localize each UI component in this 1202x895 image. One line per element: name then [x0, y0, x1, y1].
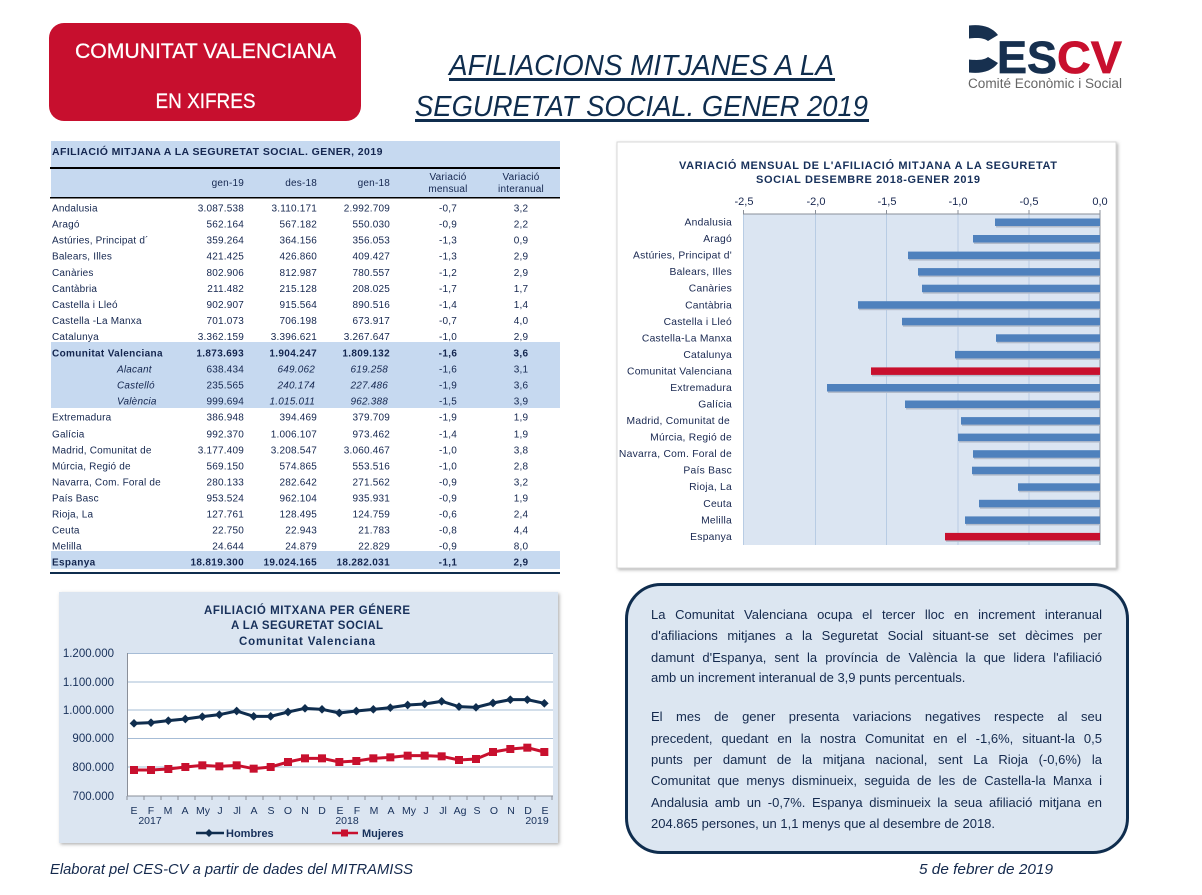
badge: Comunitat Valenciana en xifres: EN XIFRES [156, 90, 256, 113]
logo: CES-CV [968, 25, 1122, 91]
table rows continued: 1,9 [514, 429, 528, 440]
table rows continued: Melilla [52, 541, 82, 552]
table rows: 4,0 [514, 316, 528, 327]
x axis labels: -2,0 [807, 196, 825, 208]
logo: CES-CV: CV [1057, 32, 1122, 83]
rows: provinces: 3,9 [514, 396, 528, 408]
rows: provinces: 962.388 [350, 396, 388, 408]
month labels: D [318, 805, 326, 817]
month labels: My [402, 805, 417, 817]
month labels: M [164, 805, 172, 817]
table rows: 3.362.159 [198, 332, 244, 343]
table rows continued: 1,9 [514, 412, 528, 424]
table rows continued: -0,9 [439, 477, 457, 488]
table rows: 1,7 [514, 284, 528, 295]
table rows: -1,2 [439, 268, 457, 279]
month labels: My [196, 805, 211, 817]
x axis labels: -1,0 [949, 196, 967, 208]
rows: provinces: 1.015.011 [269, 396, 315, 408]
table rows continued: -0,6 [439, 509, 457, 520]
table rows: 2,2 [514, 220, 528, 230]
table rows: Andalusia [52, 204, 98, 214]
x axis labels: -2,5 [735, 196, 753, 208]
table rows continued: -0,8 [439, 525, 457, 536]
table rows continued: 22.829 [358, 541, 390, 552]
footer: source: Elaborat pel CES-CV a partir de dades del MITRAMISS [50, 862, 413, 878]
month labels: N [507, 805, 515, 817]
table rows: 409.427 [352, 252, 390, 263]
month labels: A [181, 805, 189, 817]
table rows continued: 4,4 [514, 525, 528, 536]
month labels: 2018 [335, 815, 359, 827]
table rows: Balears, Illes [52, 252, 112, 263]
table rows: 3.110.171 [271, 204, 317, 214]
table rows continued: 2,4 [514, 509, 528, 520]
category labels: País Basc [683, 466, 732, 476]
table rows: 890.516 [352, 300, 390, 311]
rows: provinces: Alacant [116, 364, 153, 376]
table rows: Castella i Lleó [52, 300, 118, 311]
table rows continued: 24.879 [285, 541, 317, 552]
table rows continued: 128.495 [279, 509, 317, 520]
category labels: Galícia [698, 400, 732, 410]
text panel: comentari: Andalusia amb un -0,7%. Espanya disminueix la seua afiliació mitjana en [651, 795, 1102, 810]
table rows continued: 127.761 [206, 509, 244, 520]
table rows: 211.482 [207, 284, 244, 295]
table rows continued: Múrcia, Regió de [52, 461, 131, 472]
month labels: Ag [454, 805, 467, 817]
y axis labels: 900.000 [72, 733, 114, 745]
table rows: Catalunya [52, 332, 99, 343]
table rows: -1,3 [439, 236, 457, 246]
month labels: M [370, 805, 378, 817]
footer: date: 5 de febrer de 2019 [919, 862, 1053, 878]
month labels: S [473, 805, 481, 817]
table rows continued: 574.865 [279, 461, 317, 472]
table rows: 215.128 [279, 284, 317, 295]
table rows: Astúries, Principat d´ [52, 234, 149, 246]
table rows continued: -1,0 [439, 461, 457, 472]
table rows continued: 124.759 [352, 509, 390, 520]
table rows continued: Ceuta [52, 525, 80, 536]
table rows continued: 3.177.409 [198, 445, 244, 456]
table header: gen-19 [212, 178, 244, 189]
month labels: O [284, 805, 292, 817]
table rows: 2,9 [514, 252, 528, 263]
table rows continued: 3,8 [514, 445, 528, 456]
table rows continued: 973.462 [352, 429, 390, 440]
table rows continued: 280.133 [206, 477, 244, 488]
table rows continued: -0,9 [439, 493, 457, 504]
table rows: -0,7 [439, 316, 457, 327]
badge: Comunitat Valenciana en xifres: COMUNITAT VALENCIANA [75, 40, 336, 63]
text panel: comentari: Comunitat que menys disminueix, seguida de les de Castella-la Manxa i [651, 773, 1102, 788]
table rows: 567.182 [279, 220, 317, 230]
category labels: Rioja, La [689, 482, 732, 493]
chart title: SOCIAL DESEMBRE 2018-GENER 2019 [756, 174, 980, 186]
table rows: 3.396.621 [271, 332, 317, 343]
table rows continued: 962.104 [279, 493, 317, 504]
text panel: comentari: La Comunitat Valenciana ocupa el tercer lloc en increment interanual [651, 607, 1102, 622]
table rows: 2,9 [514, 332, 528, 343]
text panel: comentari: punts per damunt de la mitjana nacional, sent La Rioja (-0,6%) la [651, 752, 1102, 767]
table rows: -1,3 [439, 252, 457, 263]
month labels: S [267, 805, 275, 817]
table rows: 3.267.647 [344, 332, 390, 343]
month labels: A [387, 805, 395, 817]
rows: provinces: 3,6 [514, 380, 528, 392]
table rows: Canàries [52, 268, 94, 279]
table rows: 3,2 [514, 204, 528, 214]
panel: line chart per gènere [59, 592, 558, 843]
row: Comunitat Valenciana: 1.873.693 [196, 348, 244, 360]
chart title: VARIACIÓ MENSUAL DE L'AFILIACIÓ MITJANA A LA SEGURETAT [679, 159, 1057, 172]
y axis labels [63, 648, 114, 803]
rows: provinces: València [117, 396, 157, 408]
logo: CES-CV: ES [997, 32, 1057, 83]
text panel: comentari: 204.865 persones, un 1,1 menys que al desembre de 2018. [651, 816, 995, 831]
table rows continued: Rioja, La [52, 509, 94, 520]
table rows: Aragó [52, 220, 80, 230]
month labels: E [130, 805, 138, 817]
x axis labels: 0,0 [1092, 196, 1108, 208]
logo: CES-CV: Comité Econòmic i Social [968, 76, 1122, 91]
title: SEGURETAT SOCIAL. GENER 2019 [415, 91, 868, 123]
category labels: Andalusia [685, 218, 732, 228]
table rows continued: 953.524 [206, 493, 244, 504]
row: Comunitat Valenciana: -1,6 [439, 348, 457, 360]
title [415, 50, 869, 123]
category labels: Melilla [701, 516, 732, 526]
legend [196, 828, 404, 840]
chart title: AFILIACIÓ MITXANA PER GÉNERE [204, 604, 410, 617]
table rows: 802.906 [206, 268, 244, 279]
x axis labels: -0,5 [1020, 196, 1038, 208]
table rows continued: País Basc [52, 493, 99, 504]
text panel: comentari: precedent, quedant en la nostra Comunitat en el -1,6%, situant-la 0,5 [651, 731, 1102, 746]
table rows continued: 2,8 [514, 461, 528, 472]
table rows continued: -1,9 [439, 412, 457, 424]
rows: provinces: 240.174 [276, 380, 315, 392]
text panel: comentari: d'afiliacions mitjanes a la Seguretat Social situant-se set dècimes per [651, 628, 1102, 643]
table rows continued: 553.516 [352, 461, 390, 472]
row: Comunitat Valenciana: 1.904.247 [269, 348, 317, 360]
y axis labels: 1.100.000 [63, 677, 114, 689]
table rows: 701.073 [206, 316, 244, 327]
table rows: 2.992.709 [344, 204, 390, 214]
table rows: Castella -La Manxa [52, 316, 142, 327]
category labels: Astúries, Principat d' [633, 250, 732, 262]
table rows continued: 386.948 [206, 412, 244, 424]
table rows continued: 3.060.467 [344, 445, 390, 456]
table rows: -0,7 [439, 204, 457, 214]
table rows: 356.053 [352, 236, 390, 246]
month labels: O [490, 805, 498, 817]
table rows: 915.564 [279, 300, 317, 311]
panel: bar chart variació mensual [617, 142, 1116, 568]
table header: gen-18 [358, 178, 390, 189]
table rows: -0,9 [439, 220, 457, 230]
table rows: -1,4 [439, 300, 457, 311]
category labels: Castella-La Manxa [642, 334, 732, 344]
table rows continued: 935.931 [352, 493, 390, 504]
table rows: 550.030 [352, 220, 390, 230]
table rows continued: 3.208.547 [271, 445, 317, 456]
table rows: 780.557 [352, 268, 390, 279]
rows: provinces: 619.258 [350, 364, 388, 376]
row: Comunitat Valenciana: 3,6 [514, 348, 529, 360]
category labels: Aragó [703, 234, 732, 245]
table rows [52, 204, 528, 343]
month labels: D [524, 805, 532, 817]
x axis labels [735, 196, 1108, 208]
rows: provinces: -1,9 [439, 380, 457, 392]
month labels: 2019 [525, 815, 549, 827]
table rows: 673.917 [352, 316, 390, 327]
bars [827, 218, 1100, 542]
row: Espanya: 18.819.300 [190, 558, 244, 568]
table rows: 3.087.538 [198, 204, 244, 214]
y axis labels: 700.000 [72, 791, 114, 803]
chart title [204, 604, 410, 648]
table rows continued: Madrid, Comunitat de [52, 445, 152, 456]
rows: provinces: 3,1 [514, 364, 528, 376]
table rows: 208.025 [352, 284, 390, 295]
table rows: 359.264 [206, 236, 244, 246]
table rows continued: Navarra, Com. Foral de [52, 477, 161, 488]
category labels: Madrid, Comunitat de [627, 416, 730, 427]
table rows continued: 22.750 [212, 525, 244, 536]
y axis labels: 800.000 [72, 762, 114, 774]
table rows continued: 271.562 [352, 477, 390, 488]
table header [212, 172, 544, 195]
chart title [679, 159, 1057, 186]
table rows continued: 394.469 [279, 412, 317, 424]
row: Espanya: -1,1 [439, 558, 457, 568]
table rows: 364.156 [279, 236, 317, 246]
table rows continued: -0,9 [439, 541, 457, 552]
table rows continued: Galícia [52, 429, 85, 440]
month labels: N [301, 805, 309, 817]
month labels: Jl [233, 805, 241, 817]
text panel: comentari: El mes de gener presenta variacions negatives respecte al seu [651, 709, 1102, 724]
x axis labels: -1,5 [878, 196, 896, 208]
category labels: Múrcia, Regió de [650, 432, 732, 444]
rows: provinces: 999.694 [206, 396, 244, 408]
table rows: 421.425 [206, 252, 244, 263]
row: Comunitat Valenciana: 1.809.132 [342, 348, 390, 360]
row: Espanya [52, 558, 529, 568]
table rows continued: -1,4 [439, 429, 457, 440]
row: Comunitat Valenciana: Comunitat Valenciana [52, 348, 163, 360]
series: Hombres [134, 700, 544, 723]
legend: Hombres [226, 828, 274, 840]
table rows: 902.907 [206, 300, 244, 311]
table rows: 2,9 [514, 268, 528, 279]
month labels: J [423, 805, 429, 817]
rows: provinces: 638.434 [206, 364, 244, 376]
table rows continued: 992.370 [206, 429, 244, 440]
table rows: 812.987 [279, 268, 317, 279]
text panel: comentari: amb un increment interanual de 3,9 punts percentuals. [651, 670, 965, 685]
category labels: Canàries [689, 284, 732, 294]
text panel: comentari: damunt d'Espanya, sent la província de València la que lidera l'afiliació [651, 650, 1102, 665]
table rows continued: 569.150 [206, 461, 244, 472]
table rows: 0,9 [514, 236, 528, 246]
table rows continued: 24.644 [212, 541, 244, 552]
table rows: -1,0 [439, 332, 457, 343]
category labels: Espanya [690, 532, 732, 543]
text panel: comentari [625, 583, 1129, 854]
row: Espanya: 18.282.031 [336, 558, 390, 568]
y axis labels: 1.000.000 [63, 705, 114, 717]
table rows: -1,7 [439, 284, 457, 295]
month labels: F [148, 805, 154, 817]
category labels: Cantàbria [685, 300, 732, 312]
table rows continued: 1.006.107 [271, 429, 317, 440]
month labels: 2017 [138, 815, 162, 827]
month labels: E [336, 805, 344, 817]
y axis labels: 1.200.000 [63, 648, 114, 660]
table rows continued [52, 412, 528, 552]
table header: mensual [428, 184, 468, 195]
series: Mujeres [134, 748, 544, 770]
category labels: Catalunya [683, 350, 732, 361]
table rows: Cantàbria [52, 284, 97, 295]
chart title: A LA SEGURETAT SOCIAL [231, 620, 383, 632]
title: AFILIACIONS MITJANES A LA [447, 50, 834, 82]
rows: provinces: -1,5 [439, 396, 457, 408]
table header: Variació [430, 172, 467, 183]
table rows continued: 21.783 [358, 525, 390, 536]
table rows continued: 3,2 [514, 477, 528, 488]
rows: provinces: 649.062 [277, 364, 315, 376]
table header: interanual [498, 184, 544, 195]
month labels: F [354, 805, 360, 817]
category labels: Castella i Lleó [664, 317, 732, 328]
table rows continued: -1,0 [439, 445, 457, 456]
category labels [619, 218, 732, 543]
table: afiliació mitjana [50, 141, 560, 574]
table rows continued: Extremadura [52, 412, 112, 424]
rows: provinces: 227.486 [349, 380, 388, 392]
table rows: 426.860 [279, 252, 317, 263]
category labels: Navarra, Com. Foral de [619, 449, 732, 460]
month labels: Jl [439, 805, 447, 817]
row: Espanya: Espanya [52, 558, 96, 568]
month labels: J [217, 805, 223, 817]
table rows continued: 282.642 [279, 477, 317, 488]
table header: Variació [502, 172, 540, 183]
table rows continued: 8,0 [514, 541, 528, 552]
rows: provinces: -1,6 [439, 364, 457, 376]
rows: provinces [116, 364, 528, 408]
table header: des-18 [285, 178, 317, 189]
category labels: Comunitat Valenciana [627, 366, 732, 378]
row: Espanya: 19.024.165 [263, 558, 317, 568]
table title: AFILIACIÓ MITJANA A LA SEGURETAT SOCIAL. GENER, 2019 [52, 145, 383, 158]
chart title: Comunitat Valenciana [239, 636, 376, 648]
table rows continued: 379.709 [352, 412, 390, 424]
month labels: E [541, 805, 549, 817]
row: Comunitat Valenciana [52, 348, 529, 360]
table rows continued: 1,9 [514, 493, 528, 504]
category labels: Extremadura [670, 383, 732, 394]
month labels: A [250, 805, 258, 817]
badge: Comunitat Valenciana en xifres [49, 23, 361, 121]
rows: provinces: 235.565 [206, 380, 244, 392]
table rows continued: 22.943 [285, 525, 317, 536]
row: Espanya: 2,9 [514, 558, 529, 568]
month labels [130, 805, 549, 827]
table rows: 1,4 [514, 300, 528, 311]
table rows: 562.164 [206, 220, 244, 230]
table rows: 706.198 [279, 316, 317, 327]
category labels: Balears, Illes [670, 267, 732, 278]
legend: Mujeres [362, 828, 404, 840]
category labels: Ceuta [703, 499, 732, 510]
rows: provinces: Castelló [117, 380, 155, 392]
